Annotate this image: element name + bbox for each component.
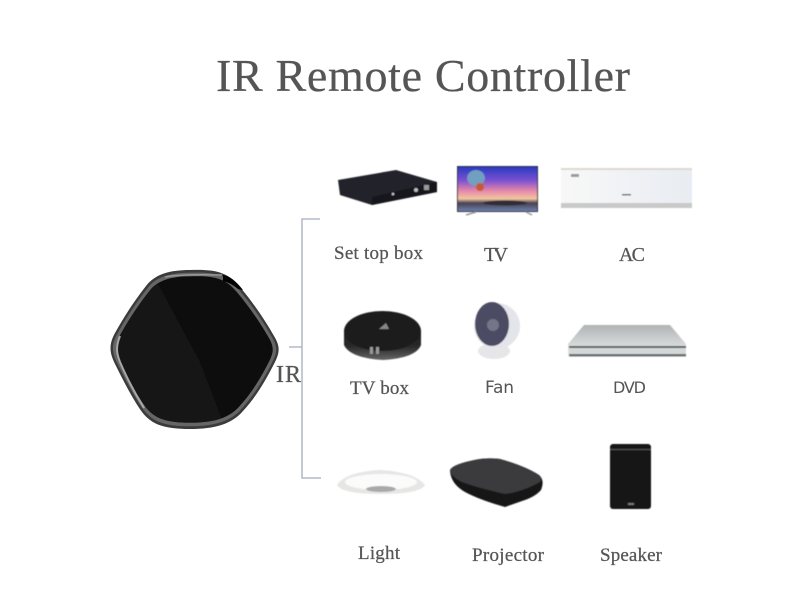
icon: TV — [457, 166, 538, 215]
icon: projector — [450, 458, 543, 507]
label: Set top box: Set top box — [334, 243, 424, 264]
title: IR Remote Controller — [216, 50, 630, 101]
icon: DVD drive — [568, 325, 686, 357]
hub device — [110, 270, 279, 429]
icon: AC — [561, 168, 692, 208]
IR label: IR — [276, 362, 301, 388]
icon: speaker — [610, 444, 651, 509]
icon: fan — [474, 302, 520, 359]
label: TV box: TV box — [350, 378, 410, 399]
label: TV: TV — [484, 244, 509, 266]
label: Fan: Fan — [485, 378, 514, 398]
label: AC: AC — [619, 244, 645, 266]
label: Speaker: Speaker — [600, 545, 663, 566]
label: Light: Light — [358, 543, 401, 564]
label: Projector: Projector — [472, 545, 545, 566]
icon: TV box — [344, 311, 421, 360]
label: DVD: DVD — [613, 378, 646, 397]
icon: ceiling light — [337, 470, 425, 494]
icon: set top box — [338, 170, 437, 205]
bracket connector — [289, 219, 321, 478]
